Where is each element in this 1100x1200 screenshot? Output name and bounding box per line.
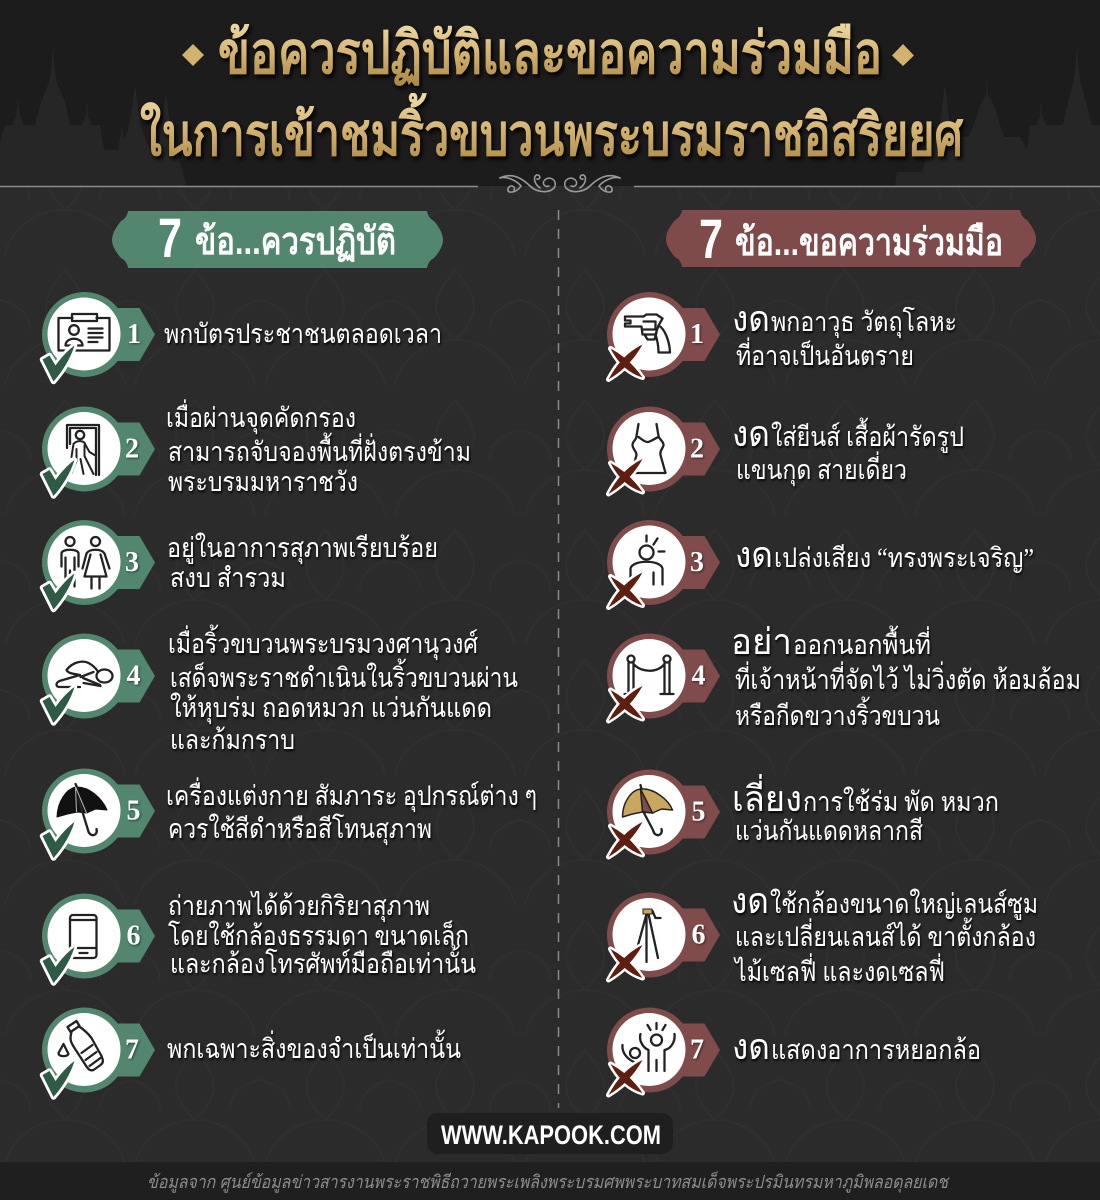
panel heading: right: 7	[699, 207, 723, 270]
text block: do-not list: งด	[732, 414, 770, 454]
text block: should-do list	[164, 319, 537, 1064]
panel: do-not list	[607, 292, 720, 1095]
footer source: ข้อมูลจาก ศูนย์ข้อมูลข่าวสารงานพระราชพิธีถวายพระเพลิงพระบรมศพพระบาทสมเด็จพระปรมินทรมหาภูมิพลอดุลยเดช	[147, 1171, 950, 1193]
text block: do-not list: เปล่งเสียง “ทรงพระเจริญ”	[774, 543, 1034, 573]
footer source	[0, 1162, 1100, 1200]
text block: do-not list: ออกนอกพื้นที่	[793, 625, 931, 660]
text block: do-not list: แว่นกันแดดหลากสี	[735, 816, 923, 846]
item 6: tripod	[607, 892, 720, 980]
text block: do-not list: อย่า	[731, 622, 792, 662]
header divider with ornament	[0, 175, 1100, 192]
text block: should-do list: สงบ สำรวม	[170, 563, 286, 593]
text block: do-not list: เลี่ยง	[732, 774, 802, 819]
item 1: revolver	[607, 292, 720, 380]
text block: do-not list: ใช้กล้องขนาดใหญ่เลนส์ซูม	[770, 888, 1038, 920]
text block: do-not list: และเปลี่ยนเลนส์ได้ ขาตั้งกล้อง	[735, 917, 1036, 952]
item 5: black umbrella: 5	[126, 796, 140, 826]
text block: do-not list: แสดงอาการหยอกล้อ	[771, 1035, 981, 1065]
icon: gold diamonds	[182, 44, 914, 66]
website badge: WWW.KAPOOK.COM	[441, 1120, 661, 1150]
item 5: black umbrella	[42, 768, 155, 858]
text block: should-do list: พกบัตรประชาชนตลอดเวลา	[164, 319, 442, 349]
website badge	[427, 1113, 673, 1154]
text block: should-do list: ควรใช้สีดำหรือสีโทนสุภาพ	[168, 813, 432, 846]
text block: do-not list: แขนกุด สายเดี่ยว	[736, 451, 907, 487]
text block: should-do list: เครื่องแต่งกาย สัมภาระ อุปกรณ์ต่าง ๆ	[166, 777, 537, 813]
item 7: water bottle: 7	[125, 1034, 139, 1066]
text block: should-do list: และก้มกราบ	[170, 725, 295, 755]
item 1: id card: 1	[127, 319, 141, 350]
item 1: revolver: 1	[690, 319, 704, 350]
text block: do-not list: พกอาวุธ วัตถุโลหะ	[771, 307, 957, 339]
item 4: bowing person: 4	[126, 660, 140, 692]
title	[140, 21, 964, 168]
title: ข้อควรปฏิบัติและขอความร่วมมือ	[218, 21, 882, 86]
text block: do-not list: งด	[731, 881, 769, 921]
panel heading: left: ข้อ...ควรปฏิบัติ	[195, 221, 396, 263]
panel: should-do list	[42, 292, 155, 1097]
panel heading: left: 7	[158, 206, 182, 269]
text block: should-do list: พกเฉพาะสิ่งของจำเป็นเท่านั้น	[167, 1029, 461, 1064]
text block: do-not list: หรือกีดขวางริ้วขบวน	[735, 696, 940, 731]
item 2: tank dress	[607, 406, 720, 494]
text block: do-not list: ไม้เซลฟี่ และงดเซลฟี่	[733, 953, 945, 987]
item 4: rope barrier: 4	[692, 660, 706, 692]
text block: do-not list	[731, 299, 1081, 1067]
item 2: person walking through door	[42, 406, 155, 496]
item 1: id card	[42, 292, 155, 382]
text block: should-do list: เมื่อผ่านจุดคัดกรอง	[166, 399, 356, 435]
text block: do-not list: งด	[732, 299, 770, 339]
text block: should-do list: ถ่ายภาพได้ด้วยกิริยาสุภาพ	[168, 891, 430, 923]
item 3: man and woman	[42, 520, 155, 610]
item 3: man and woman: 3	[125, 547, 139, 578]
panel heading: left	[112, 206, 443, 269]
center dashed divider	[558, 210, 560, 1108]
item 7: water bottle	[42, 1008, 155, 1097]
item 5: coloured umbrella	[607, 770, 720, 857]
text block: do-not list: งด	[732, 1027, 770, 1067]
item 4: rope barrier	[607, 634, 720, 721]
item 7: cheering people	[607, 1008, 720, 1095]
item 3: shouting person: 3	[690, 547, 704, 578]
text block: should-do list: พระบรมมหาราชวัง	[168, 467, 358, 497]
text block: do-not list: การใช้ร่ม พัด หมวก	[803, 786, 999, 817]
panel heading: right	[666, 207, 1036, 270]
text block: should-do list: อยู่ในอาการสุภาพเรียบร้อย	[167, 532, 438, 565]
text block: should-do list: สามารถจับจองพื้นที่ฝั่งตรงข้าม	[168, 432, 471, 467]
text block: should-do list: เสด็จพระราชดำเนินในริ้วขบวนผ่าน	[170, 658, 518, 693]
header band	[0, 0, 1100, 186]
text block: should-do list: และกล้องโทรศัพท์มือถือเท่านั้น	[170, 944, 476, 979]
panel heading: right: ข้อ...ขอความร่วมมือ	[735, 222, 1003, 264]
item 6: tripod: 6	[692, 920, 706, 950]
item 6: smartphone	[42, 894, 155, 983]
text block: should-do list: ให้หุบร่ม ถอดหมวก แว่นกันแดด	[170, 692, 492, 725]
text block: do-not list: งด	[735, 535, 773, 575]
item 3: shouting person	[607, 520, 720, 608]
item 2: tank dress: 2	[690, 434, 704, 464]
item 5: coloured umbrella: 5	[692, 796, 706, 828]
item 6: smartphone: 6	[126, 920, 140, 952]
text block: do-not list: ใส่ยีนส์ เสื้อผ้ารัดรูป	[771, 417, 964, 453]
text block: do-not list: ที่อาจเป็นอันตราย	[736, 337, 914, 371]
item 4: bowing person	[42, 634, 155, 723]
item 7: cheering people: 7	[690, 1034, 704, 1066]
text block: should-do list: เมื่อริ้วขบวนพระบรมวงศานุวงศ์	[168, 624, 478, 661]
item 2: person walking through door: 2	[125, 434, 139, 464]
text block: should-do list: โดยใช้กล้องธรรมดา ขนาดเล็ก	[168, 918, 469, 951]
